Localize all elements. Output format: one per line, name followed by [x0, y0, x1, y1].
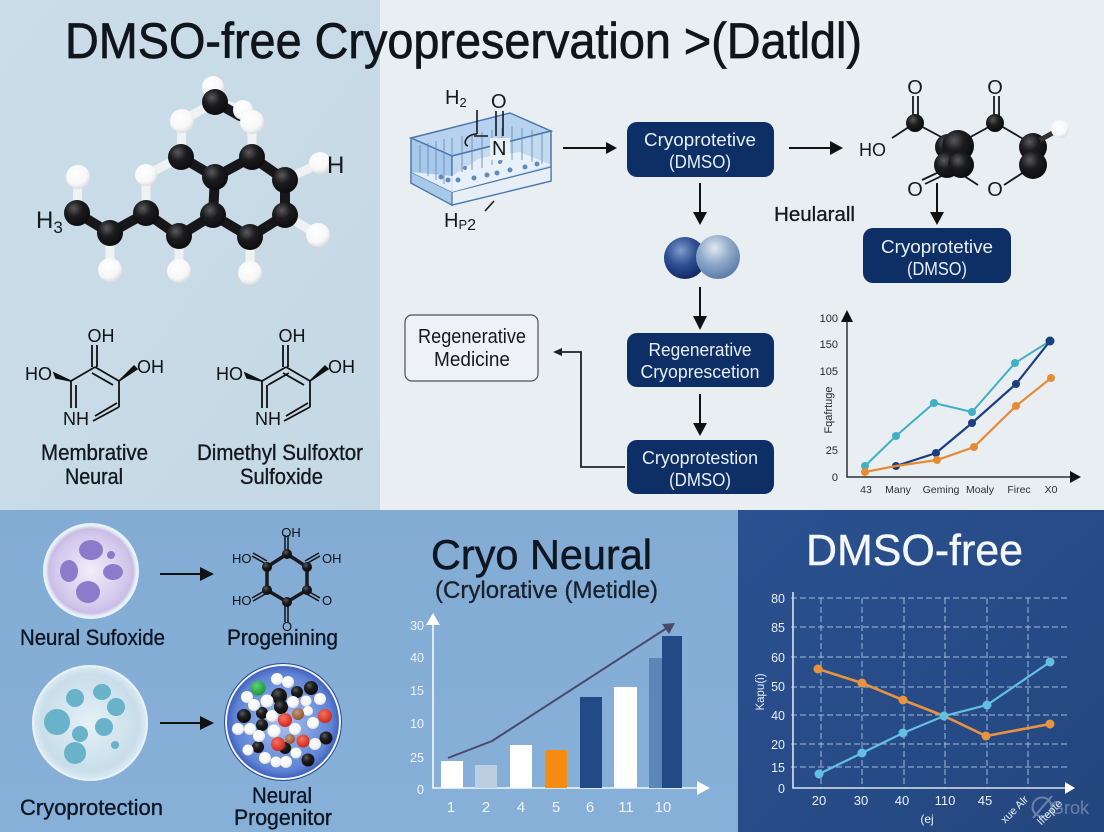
arrow: teal cell to dish [160, 716, 214, 730]
line chart: two series: 30 [854, 793, 868, 808]
icon: oxygenated molecule: HO [859, 140, 886, 160]
bar chart: 5 [552, 799, 560, 816]
icon: cryo container: O [491, 91, 507, 113]
icon: two spheres [664, 235, 740, 279]
icon: hexagon molecule: HO [232, 593, 252, 608]
line chart: two series: 60 [771, 651, 785, 665]
box: Cryoprotestion DMSO [627, 440, 774, 494]
bar chart: 15 [410, 684, 424, 698]
arrow: neural cell to molecule [160, 567, 214, 581]
icon: oxygenated molecule [859, 77, 1069, 201]
line chart: two series: 20 [812, 793, 826, 808]
icon: cryo container: 2 [467, 217, 476, 234]
box: Regenerative Cryoprescetion [627, 333, 774, 387]
line chart: three series: Firec [1007, 484, 1031, 496]
label: Neural Progenitor: Progenitor [234, 805, 332, 830]
icon: oxygenated molecule: O [987, 179, 1003, 201]
line chart: two series: xue Alr [999, 794, 1031, 826]
arrow: feedback bracket [553, 348, 625, 467]
icon: structural formula left: OH [88, 326, 114, 346]
label: Neural Sufoxide: Neural Sufoxide [20, 625, 165, 650]
bar chart: 10 [655, 799, 671, 816]
icon: oxygenated molecule: O [987, 77, 1003, 99]
line chart: two series: 40 [895, 793, 909, 808]
line chart: two series: 20 [771, 738, 785, 752]
icon: structural formula right: HO [216, 364, 243, 384]
line chart: three series: 0 [832, 472, 838, 484]
label: Dimethyl Sulfoxtor Sulfoxide [197, 440, 363, 489]
label: Membrative Neural [41, 440, 148, 489]
icon: hexagon molecule [232, 525, 342, 634]
arrow: box to box [693, 394, 707, 436]
box: Cryoprotetive DMSO right [863, 228, 1011, 283]
heading: DMSO-free: DMSO-free [806, 526, 1023, 575]
label: Dimethyl Sulfoxtor Sulfoxide: Sulfoxide [240, 464, 323, 489]
icon: hexagon molecule: OH [281, 525, 301, 540]
box: Regenerative Medicine: Regenerative [418, 326, 526, 348]
line chart: three series: Geming [923, 484, 960, 496]
label: Cryoprotection: Cryoprotection [20, 795, 163, 820]
label: Heularall: Heularall [774, 204, 855, 226]
bar chart: 6 [586, 799, 594, 816]
line chart: two series: (ej [920, 812, 934, 826]
icon: cryo container [411, 87, 551, 234]
icon: hexagon molecule: HO [232, 551, 252, 566]
bar chart: 1 [447, 799, 455, 816]
line chart: three series: 105 [820, 366, 838, 378]
line chart: two series: 45 [978, 793, 992, 808]
label: Neural Progenitor [234, 783, 332, 830]
bar chart: 11 [618, 799, 634, 816]
icon: ball-and-stick molecule [36, 76, 344, 285]
arrow: molecule to box [930, 183, 944, 225]
line chart: two series: 110 [935, 793, 955, 808]
label: Neural Progenitor: Neural [252, 783, 312, 808]
bar chart: 2 [482, 799, 490, 816]
watermark: Grok [1032, 796, 1090, 818]
bar chart: 0 [417, 783, 424, 797]
box: Cryoprotestion DMSO: Cryoprotestion [642, 448, 758, 468]
icon: hexagon molecule: O [322, 593, 332, 608]
box: Cryoprotetive DMSO: Cryoprotetive [644, 130, 756, 150]
panel: DMSO-free chart [738, 510, 1104, 832]
bar chart [410, 613, 710, 816]
panel: cells and bar chart [0, 510, 738, 832]
heading: Cryo Neural: Cryo Neural [431, 531, 652, 578]
line chart: two series: 50 [771, 680, 785, 694]
icon: teal cryoprotected cell [33, 666, 147, 780]
line chart: two series: 80 [771, 592, 785, 606]
icon: purple neural cell [44, 524, 138, 618]
icon: oxygenated molecule: O [907, 179, 923, 201]
icon: ball-and-stick molecule: H [327, 152, 344, 179]
line chart: three series [820, 310, 1081, 496]
arrow: box to molecule [789, 141, 843, 155]
box: Cryoprotetive DMSO [627, 122, 774, 177]
bar chart: 25 [410, 751, 424, 765]
icon: cryo container: N [492, 138, 506, 160]
line chart: two series: 40 [771, 709, 785, 723]
box: Regenerative Medicine [405, 315, 538, 381]
icon: structural formula left: NH [63, 409, 89, 429]
watermark: Grok: Grok [1050, 798, 1090, 818]
label: Membrative Neural: Neural [65, 464, 123, 489]
icon: oxygenated molecule: O [907, 77, 923, 99]
box: Cryoprotetive DMSO right: Cryoprotetive [881, 237, 993, 257]
label: Dimethyl Sulfoxtor Sulfoxide: Dimethyl Sulfoxtor [197, 440, 363, 465]
icon: structural formula right: OH [328, 357, 355, 377]
line chart: three series: 150 [820, 339, 838, 351]
line chart: two series: 15 [771, 761, 785, 775]
bar chart: 40 [410, 651, 424, 665]
bar chart: 10 [410, 717, 424, 731]
icon: cryo container: 2 [459, 95, 467, 110]
arrow: box down to spheres [693, 183, 707, 225]
line chart: three series: X0 [1045, 484, 1058, 496]
subheading: Crylorative Metidle: (Crylorative (Metidle) [435, 577, 658, 604]
icon: hexagon molecule: OH [322, 551, 342, 566]
box: Regenerative Cryoprescetion: Cryoprescetion [640, 362, 760, 382]
arrow: spheres to box [693, 287, 707, 330]
line chart: two series: 0 [778, 782, 785, 796]
icon: cryo container: P [458, 217, 467, 232]
bar chart: 4 [517, 799, 525, 816]
label: Progenining: Progenining [227, 625, 338, 650]
line chart: three series: Moaly [966, 484, 995, 496]
box: Cryoprotestion DMSO: (DMSO) [669, 470, 731, 490]
box: Cryoprotetive DMSO: (DMSO) [669, 152, 731, 172]
line chart: three series: Many [885, 484, 912, 496]
box: Regenerative Medicine: Medicine [434, 349, 510, 371]
icon: cryo container: H [444, 210, 458, 232]
icon: structural formula left: OH [137, 357, 164, 377]
line chart: three series: 43 [860, 484, 872, 496]
label: Membrative Neural: Membrative [41, 440, 148, 465]
line chart: two series: 85 [771, 621, 785, 635]
line chart: three series: Fqafrtuge [823, 386, 835, 434]
line chart: three series: 100 [820, 313, 838, 325]
icon: atom cluster dish [224, 664, 342, 780]
box: Regenerative Cryoprescetion: Regenerative [648, 340, 752, 360]
line chart: three series: 25 [826, 445, 838, 457]
icon: cryo container: H [445, 87, 459, 109]
icon: structural formula right [216, 326, 355, 429]
icon: structural formula right: NH [255, 409, 281, 429]
icon: structural formula left: HO [25, 364, 52, 384]
panel: molecular structures [0, 0, 380, 510]
line chart: two series: Iftepte [1035, 798, 1065, 828]
icon: ball-and-stick molecule: 3 [53, 218, 63, 237]
panel: process flow [380, 0, 1104, 510]
icon: ball-and-stick molecule: H [36, 207, 53, 234]
icon: hexagon molecule: O [282, 619, 292, 634]
title: DMSO-free Cryopreservation >(Datldl) [65, 13, 862, 69]
line chart: two series: Kapu(i) [755, 673, 767, 711]
icon: structural formula right: OH [278, 326, 306, 346]
icon: structural formula left [25, 326, 164, 429]
arrow: container to box [563, 142, 617, 154]
box: Cryoprotetive DMSO right: (DMSO) [907, 259, 967, 279]
line chart: two series [755, 592, 1075, 828]
bar chart: 30 [410, 619, 424, 633]
